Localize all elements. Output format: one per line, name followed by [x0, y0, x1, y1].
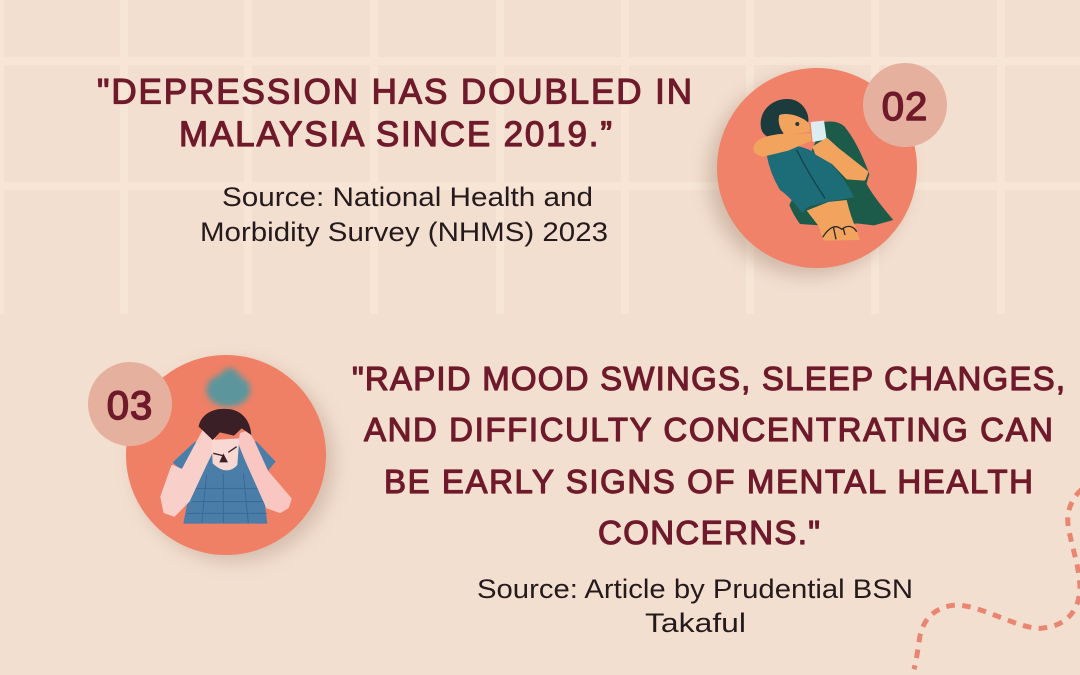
heading: depression statistic: "DEPRESSION HAS DOUBLED IN [97, 72, 692, 112]
source: Prudential BSN Takaful [477, 574, 913, 638]
badge: 02: 02 [882, 85, 928, 129]
icon: person curled up with phone [708, 68, 917, 276]
source: Prudential BSN Takaful: Takaful [645, 608, 746, 638]
source: NHMS 2023: Morbidity Survey (NHMS) 2023 [200, 217, 608, 247]
badge: 03: 03 [107, 384, 153, 428]
heading: depression statistic [97, 72, 692, 154]
source: NHMS 2023 [200, 182, 608, 247]
badge: 03 [88, 362, 172, 446]
badge: 02 [863, 63, 947, 147]
heading: depression statistic: MALAYSIA SINCE 2019.” [179, 115, 612, 154]
heading: early warning signs: CONCERNS." [598, 514, 820, 551]
source: NHMS 2023: Source: National Health and [222, 182, 593, 212]
decorative dashed line [914, 489, 1080, 669]
source: Prudential BSN Takaful: Source: Article by Prudential BSN [477, 574, 913, 604]
heading: early warning signs: AND DIFFICULTY CONCENTRATING CAN [364, 411, 1053, 448]
heading: early warning signs: BE EARLY SIGNS OF MENTAL HEALTH [384, 463, 1033, 500]
heading: early warning signs: "RAPID MOOD SWINGS, SLEEP CHANGES, [352, 360, 1065, 397]
heading: early warning signs [352, 360, 1065, 551]
icon: stressed man holding head [126, 355, 334, 562]
